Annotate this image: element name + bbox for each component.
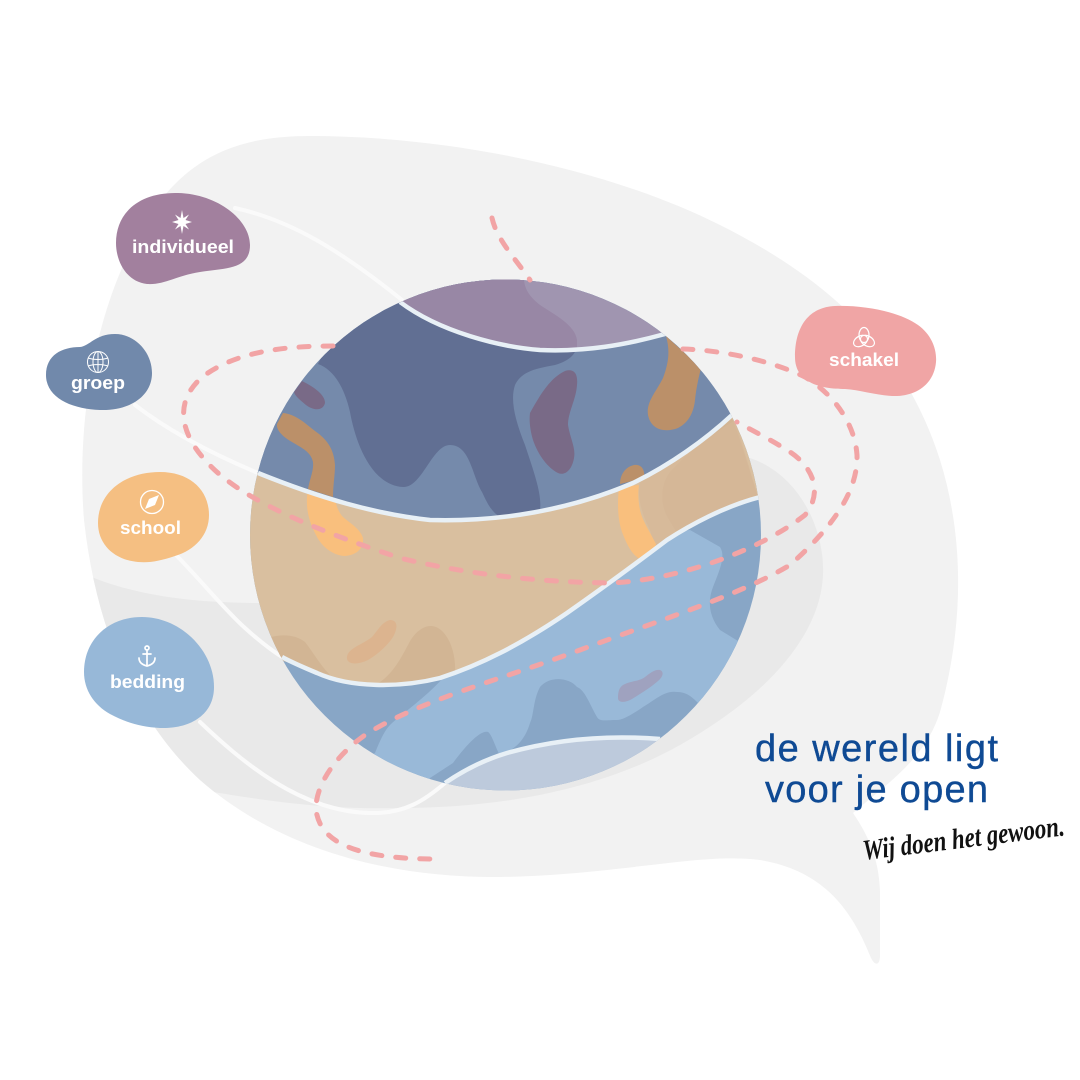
label: schakel	[795, 306, 936, 396]
top cap	[405, 280, 662, 348]
speech bubble background	[82, 136, 958, 964]
globe	[250, 280, 761, 790]
brown land right	[648, 336, 701, 430]
brown land left	[277, 413, 335, 497]
blob bedding	[84, 617, 214, 728]
text schakel: schakel	[829, 350, 899, 370]
brown land centre	[620, 465, 644, 484]
band lines	[258, 302, 760, 783]
blob groep	[46, 334, 152, 410]
label: individueel	[116, 193, 250, 284]
blob individueel	[116, 193, 250, 284]
icon: globe	[88, 352, 108, 372]
purple lake	[618, 670, 663, 702]
orange land left	[307, 490, 363, 556]
globe base: dark blue band	[240, 270, 770, 800]
bottom cap	[448, 740, 656, 790]
dashed orbits	[184, 218, 857, 859]
tan band	[240, 415, 770, 685]
top cap dark land	[402, 280, 577, 348]
label: bedding	[84, 617, 214, 728]
icon: star	[172, 210, 192, 234]
connector lines	[135, 208, 445, 813]
heading: voor je open	[765, 769, 988, 811]
dark land	[318, 270, 577, 517]
purple lake centre	[530, 370, 577, 474]
icon: anchor	[139, 646, 155, 666]
tan land lower left	[268, 635, 330, 675]
purple lake left	[294, 381, 325, 409]
tan land lower centre	[377, 626, 455, 685]
label: groep	[46, 334, 152, 410]
text school: school	[120, 518, 181, 538]
text bedding: bedding	[110, 672, 185, 692]
heading: de wereld ligt	[755, 728, 998, 770]
globe shadow	[80, 458, 823, 808]
tan land mid	[734, 421, 737, 427]
blob school	[98, 472, 209, 562]
label: school	[98, 472, 209, 562]
text groep: groep	[71, 373, 125, 393]
heading	[755, 728, 998, 811]
tan lake	[347, 620, 396, 663]
light blue ocean band	[374, 530, 738, 779]
icon: triquetra	[852, 328, 876, 349]
text individueel: individueel	[132, 237, 234, 257]
blob schakel	[795, 306, 936, 396]
icon: compass	[140, 490, 164, 514]
tan land right	[715, 418, 733, 433]
orange land centre	[618, 485, 656, 559]
dark blue band	[258, 280, 732, 518]
